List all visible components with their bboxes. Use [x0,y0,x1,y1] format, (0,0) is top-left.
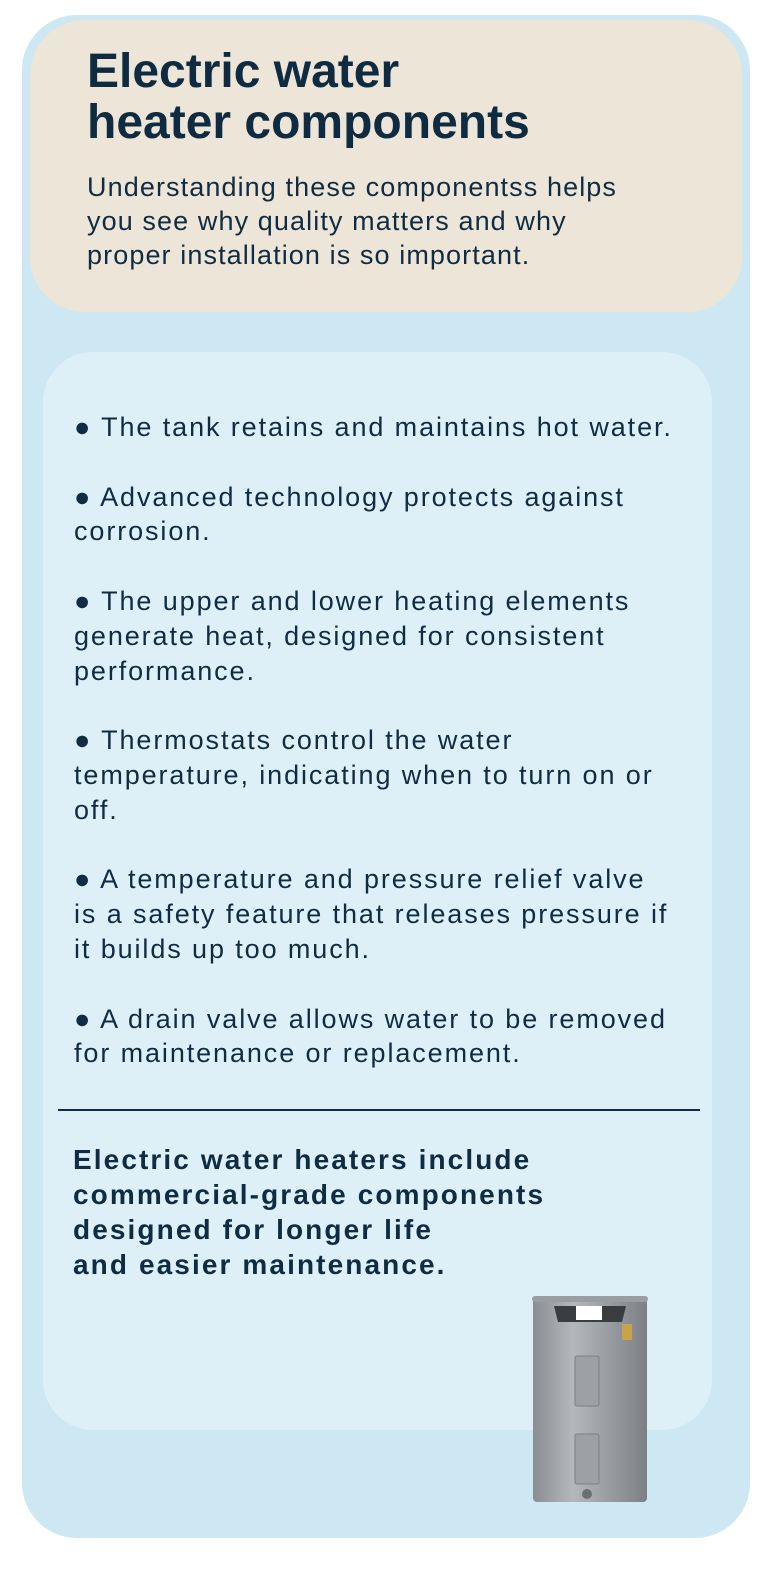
bullet list: is a safety feature that releases pressure if [74,899,668,929]
icon: water heater [532,1296,648,1502]
bullet list: generate heat, designed for consistent [74,621,606,651]
bullet list: ● Thermostats control the water [74,725,513,755]
title: heater components [87,96,530,149]
bullet list: ● The upper and lower heating elements [74,586,630,616]
bullet list: it builds up too much. [74,934,371,964]
bullet list: corrosion. [74,516,212,546]
subtitle: proper installation is so important. [87,240,530,270]
title [87,45,530,149]
bullet list: ● A drain valve allows water to be removed [74,1004,667,1034]
bullet list: temperature, indicating when to turn on or [74,760,654,790]
bullet list: for maintenance or replacement. [74,1038,522,1068]
title: Electric water [87,45,399,98]
bullet list: performance. [74,656,256,686]
subtitle: you see why quality matters and why [87,206,567,236]
bullet list: ● Advanced technology protects against [74,482,625,512]
subtitle [87,172,617,270]
bullet list: off. [74,795,119,825]
closing statement: and easier maintenance. [73,1249,447,1280]
content panel [43,352,712,1430]
bullet list: ● The tank retains and maintains hot water. [74,412,673,442]
header panel [30,20,742,312]
closing statement: designed for longer life [73,1214,433,1245]
closing statement: commercial-grade components [73,1179,545,1210]
closing statement: Electric water heaters include [73,1144,531,1175]
bullet list [74,412,673,1068]
closing statement [73,1144,545,1280]
subtitle: Understanding these componentss helps [87,172,617,202]
bullet list: ● A temperature and pressure relief valve [74,864,645,894]
